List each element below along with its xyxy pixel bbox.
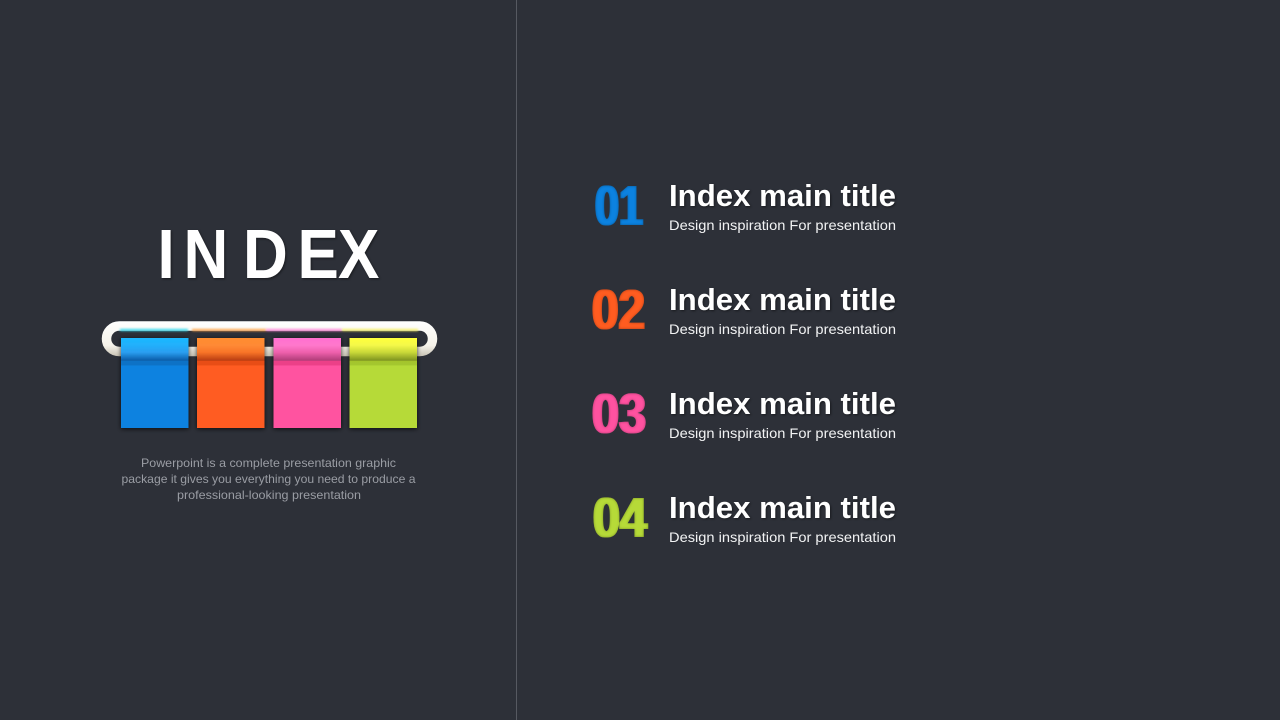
item subtitle: Design inspiration For presentation: [669, 529, 896, 545]
number 01: 01: [595, 174, 643, 238]
tab: lime: [350, 338, 417, 428]
item title: Index main title: [669, 178, 896, 213]
heading: INDEX: INDEX: [158, 215, 379, 293]
description paragraph: package it gives you everything you need to produce a: [122, 472, 416, 486]
tab: orange: [197, 338, 264, 428]
item title: Index main title: [669, 490, 896, 525]
item subtitle: Design inspiration For presentation: [669, 425, 896, 441]
description paragraph: [122, 456, 416, 502]
tab: pink: [274, 338, 341, 428]
number 02: 02: [592, 278, 645, 342]
item title: Index main title: [669, 386, 896, 421]
description paragraph: professional-looking presentation: [177, 488, 361, 502]
tab: blue: [121, 338, 188, 428]
number 03: 03: [592, 382, 646, 446]
item title: Index main title: [669, 282, 896, 317]
rail: [106, 326, 432, 352]
illustration: rail with four hanging tabs: [106, 326, 432, 428]
item subtitle: Design inspiration For presentation: [669, 217, 896, 233]
description paragraph: Powerpoint is a complete presentation graphic: [141, 456, 396, 470]
number 04: 04: [593, 486, 647, 550]
item subtitle: Design inspiration For presentation: [669, 321, 896, 337]
vertical divider: [516, 0, 517, 720]
index item 02: [592, 278, 896, 342]
index item 01: [595, 174, 896, 238]
index item 04: [593, 486, 896, 550]
index item 03: [592, 382, 896, 446]
